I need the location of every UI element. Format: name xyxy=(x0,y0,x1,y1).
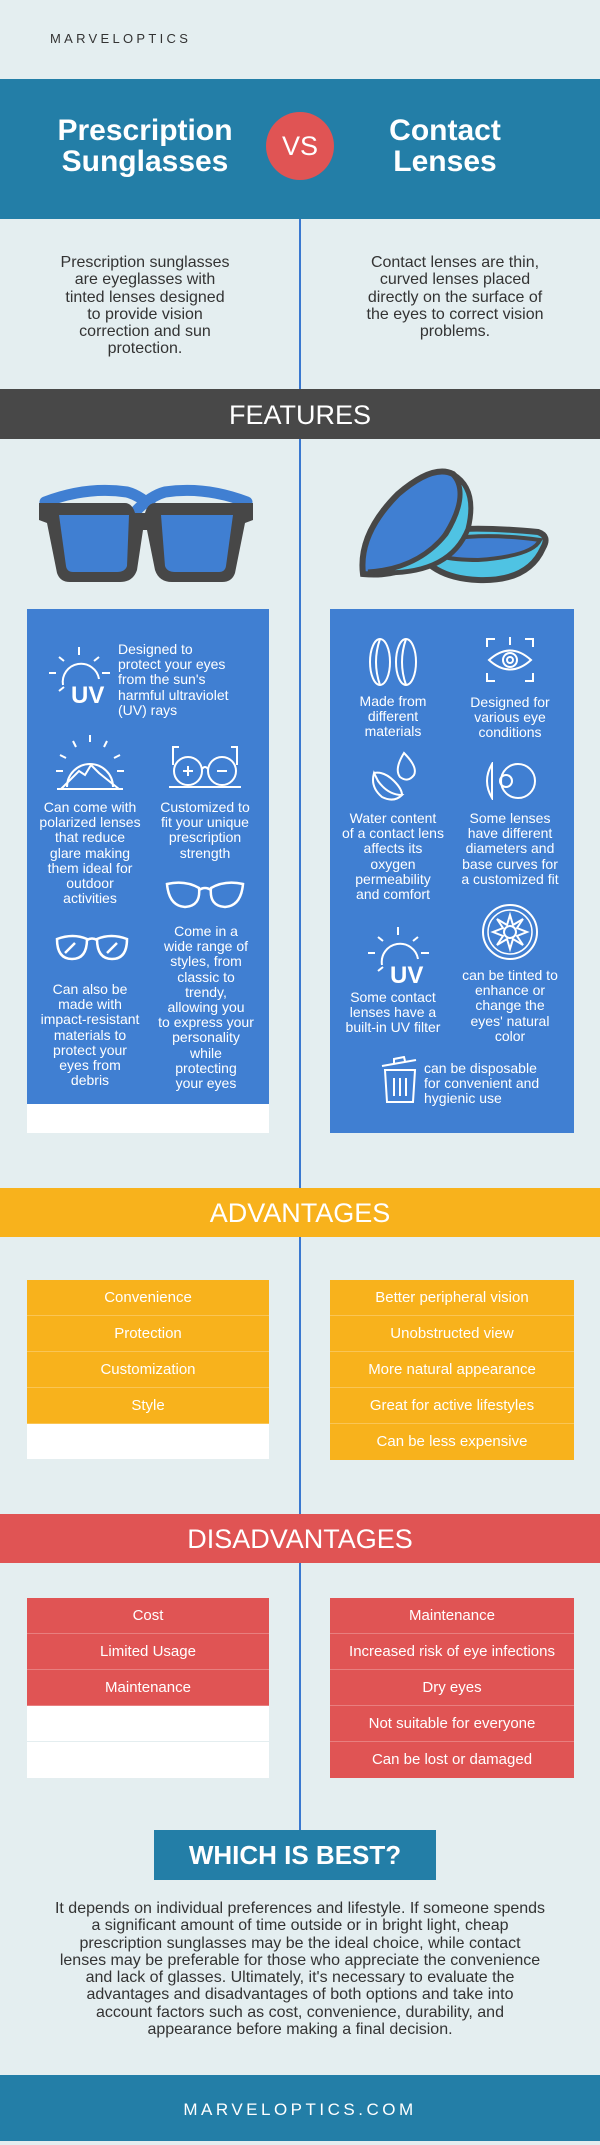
text: uv: Designed to xyxy=(118,641,193,657)
icon: water drop lens xyxy=(372,751,416,801)
text: materials xyxy=(360,693,426,739)
description right: curved lenses placed xyxy=(380,271,530,288)
text: styles: trendy, xyxy=(185,984,227,1000)
disadvantages band: DISADVANTAGES xyxy=(187,1524,413,1554)
text: impact: protect your xyxy=(53,1042,127,1058)
text: impact: materials to xyxy=(54,1027,126,1043)
disadvantages band xyxy=(0,1514,600,1563)
text: polarized: polarized lenses xyxy=(39,814,141,830)
title left: Sunglasses xyxy=(62,145,228,178)
text: styles: personality xyxy=(172,1029,240,1045)
list: glasses disadvantages: Cost xyxy=(133,1607,163,1624)
text: water content xyxy=(342,810,444,902)
list: contacts advantages: Great for active lifestyles xyxy=(370,1397,534,1414)
text: styles: classic to xyxy=(177,969,235,985)
text: impact: made with xyxy=(58,996,122,1012)
icon: uv sun 2 xyxy=(368,927,429,985)
center divider line xyxy=(299,219,301,1830)
text: uv filter: lenses have a xyxy=(350,1004,436,1020)
text: diameters xyxy=(461,810,559,887)
text: diameters: base curves for xyxy=(462,856,558,872)
icon: trash xyxy=(382,1056,416,1103)
advantages band xyxy=(0,1188,600,1237)
list: contacts disadvantages: Increased risk of eye infections xyxy=(349,1643,555,1660)
text: customized: strength xyxy=(180,845,230,861)
which is best box xyxy=(154,1830,436,1880)
text: styles xyxy=(158,923,254,1091)
description left: are eyeglasses with xyxy=(75,271,215,288)
conclusion text: lenses may be preferable for those who appreciate the convenience xyxy=(60,1952,540,1969)
text: customized: prescription xyxy=(169,829,241,845)
features band: FEATURES xyxy=(229,400,371,430)
text: styles: wide range of xyxy=(164,938,248,954)
text: water content: and comfort xyxy=(356,886,430,902)
icon: sunglasses xyxy=(39,484,253,582)
text: disposable xyxy=(424,1060,539,1106)
text: materials: different xyxy=(368,708,418,724)
text: uv: from the sun's xyxy=(118,671,206,687)
text: disposable: for convenient and xyxy=(424,1075,539,1091)
text: conditions xyxy=(470,694,550,740)
text: customized xyxy=(160,799,250,861)
conclusion text xyxy=(55,1900,545,2038)
icon: two lenses xyxy=(369,638,417,686)
text: polarized: them ideal for xyxy=(48,860,132,876)
list: contacts advantages: Better peripheral vision xyxy=(375,1289,529,1306)
text: tinted: color xyxy=(495,1028,525,1044)
description right xyxy=(366,254,543,340)
list: glasses advantages: Customization xyxy=(100,1361,196,1378)
text: tinted xyxy=(462,967,558,1044)
description right: Contact lenses are thin, xyxy=(371,254,539,271)
icon: round glasses xyxy=(56,934,128,960)
text: polarized: outdoor xyxy=(66,875,114,891)
text: materials: materials xyxy=(365,723,421,739)
list: contacts disadvantages: Maintenance xyxy=(409,1607,495,1624)
text: disposable: can be disposable xyxy=(424,1060,537,1076)
text: diameters: Some lenses xyxy=(470,810,550,826)
text: styles: styles, from xyxy=(170,953,242,969)
text: customized: Customized to xyxy=(160,799,250,815)
conclusion text: advantages and disadvantages of both options and take into xyxy=(86,1986,514,2003)
text: impact: debris xyxy=(71,1072,109,1088)
text: conditions: Designed for xyxy=(470,694,550,710)
list: glasses disadvantages: Limited Usage xyxy=(100,1643,196,1660)
text: uv: harmful ultraviolet xyxy=(118,687,228,703)
text: styles: Come in a xyxy=(174,923,238,939)
text: diameters: have different xyxy=(468,825,552,841)
conclusion text: appearance before making a final decision. xyxy=(147,2021,453,2038)
footer band: MARVELOPTICS.COM xyxy=(183,2100,417,2119)
list: contacts disadvantages: Dry eyes xyxy=(422,1679,482,1696)
text: polarized: Can come with xyxy=(44,799,136,815)
title left xyxy=(57,114,233,178)
conclusion text: It depends on individual preferences and lifestyle. If someone spends xyxy=(55,1900,545,1917)
footer band xyxy=(0,2075,600,2141)
conclusion text: a significant amount of time outside or in bright light, cheap xyxy=(91,1917,509,1934)
header band xyxy=(0,79,600,219)
description left: correction and sun xyxy=(79,323,211,340)
text: uv xyxy=(118,641,228,718)
title right: Contact xyxy=(389,114,501,147)
text: uv: protect your eyes xyxy=(118,656,225,672)
description left: Prescription sunglasses xyxy=(61,254,229,271)
text: styles: your eyes xyxy=(176,1075,236,1091)
text: diameters: diameters and xyxy=(466,840,554,856)
text: uv: (UV) rays xyxy=(118,702,177,718)
text: uv filter: built-in UV filter xyxy=(346,1019,440,1035)
description left: protection. xyxy=(108,340,182,357)
text: tinted: eyes' natural xyxy=(471,1013,549,1029)
text: polarized: glare making xyxy=(50,845,130,861)
text: impact: Can also be xyxy=(53,981,127,997)
vs circle xyxy=(266,112,334,180)
title right: Lenses xyxy=(393,145,497,178)
text: tinted: can be tinted to xyxy=(462,967,558,983)
text: tinted: enhance or xyxy=(475,982,545,998)
advantages band: ADVANTAGES xyxy=(210,1198,390,1228)
text: customized: fit your unique xyxy=(161,814,249,830)
list: glasses advantages: Style xyxy=(131,1397,165,1414)
description right: problems. xyxy=(420,323,490,340)
text: conditions: various eye xyxy=(474,709,546,725)
text: water content: oxygen xyxy=(370,856,416,872)
icon: uv sun xyxy=(49,647,110,707)
text: polarized xyxy=(39,799,141,906)
description left xyxy=(61,254,229,357)
list: glasses disadvantages: Maintenance xyxy=(105,1679,191,1696)
icon: contact lenses xyxy=(359,468,549,584)
icon: iris xyxy=(482,904,538,960)
panel: sunglasses features xyxy=(27,609,269,1133)
icon: sun mountains xyxy=(56,735,124,790)
list: glasses advantages xyxy=(27,1280,269,1459)
text: diameters: a customized fit xyxy=(461,871,559,887)
list: contacts advantages xyxy=(330,1280,574,1460)
text: styles: while xyxy=(190,1045,222,1061)
text: impact: impact-resistant xyxy=(41,1011,139,1027)
description left: to provide vision xyxy=(87,306,203,323)
text: materials: Made from xyxy=(360,693,426,709)
text: water content: affects its xyxy=(364,840,422,856)
text: impact: eyes from xyxy=(59,1057,121,1073)
text: styles: allowing you xyxy=(167,999,245,1015)
description right: the eyes to correct vision xyxy=(367,306,543,323)
text: water content: of a contact lens xyxy=(342,825,444,841)
icon: eye target xyxy=(486,637,534,682)
text: water content: Water content xyxy=(350,810,436,826)
text: impact xyxy=(41,981,140,1088)
vs circle: VS xyxy=(282,131,318,161)
list: contacts disadvantages: Can be lost or damaged xyxy=(372,1751,532,1768)
list: contacts advantages: More natural appearance xyxy=(368,1361,536,1378)
list: glasses disadvantages xyxy=(27,1598,269,1778)
text: uv filter xyxy=(346,989,440,1035)
text: tinted: change the xyxy=(475,997,545,1013)
list: contacts disadvantages xyxy=(330,1598,574,1778)
description right: directly on the surface of xyxy=(368,289,542,306)
icon: cat eye glasses xyxy=(166,881,244,908)
text: water content: permeability xyxy=(355,871,431,887)
conclusion text: account factors such as cost, convenience, durability, and xyxy=(96,2004,504,2021)
text: styles: to express your xyxy=(158,1014,254,1030)
list: contacts advantages: Can be less expensive xyxy=(377,1433,527,1450)
panel: contact lens features xyxy=(330,609,574,1133)
features band xyxy=(0,389,600,439)
text: polarized: that reduce xyxy=(55,829,125,845)
list: contacts disadvantages: Not suitable for everyone xyxy=(369,1715,535,1732)
conclusion text: prescription sunglasses may be the ideal choice, while contact xyxy=(79,1935,521,1952)
title left: Prescription xyxy=(57,114,233,147)
brand top: MARVELOPTICS xyxy=(50,31,191,46)
list: glasses advantages: Protection xyxy=(114,1325,182,1342)
list: glasses advantages: Convenience xyxy=(104,1289,192,1306)
title right xyxy=(389,114,501,178)
text: uv filter: Some contact xyxy=(350,989,436,1005)
which is best box: WHICH IS BEST? xyxy=(189,1840,401,1870)
description left: tinted lenses designed xyxy=(65,289,225,306)
text: styles: protecting xyxy=(175,1060,237,1076)
conclusion text: and lack of glasses. Ultimately, it's necessary to evaluate the xyxy=(86,1969,514,1986)
icon: prescription glasses xyxy=(169,746,241,788)
text: disposable: hygienic use xyxy=(424,1090,502,1106)
text: polarized: activities xyxy=(63,890,117,906)
icon: eye lens xyxy=(486,762,536,800)
text: conditions: conditions xyxy=(478,724,542,740)
list: contacts advantages: Unobstructed view xyxy=(390,1325,514,1342)
